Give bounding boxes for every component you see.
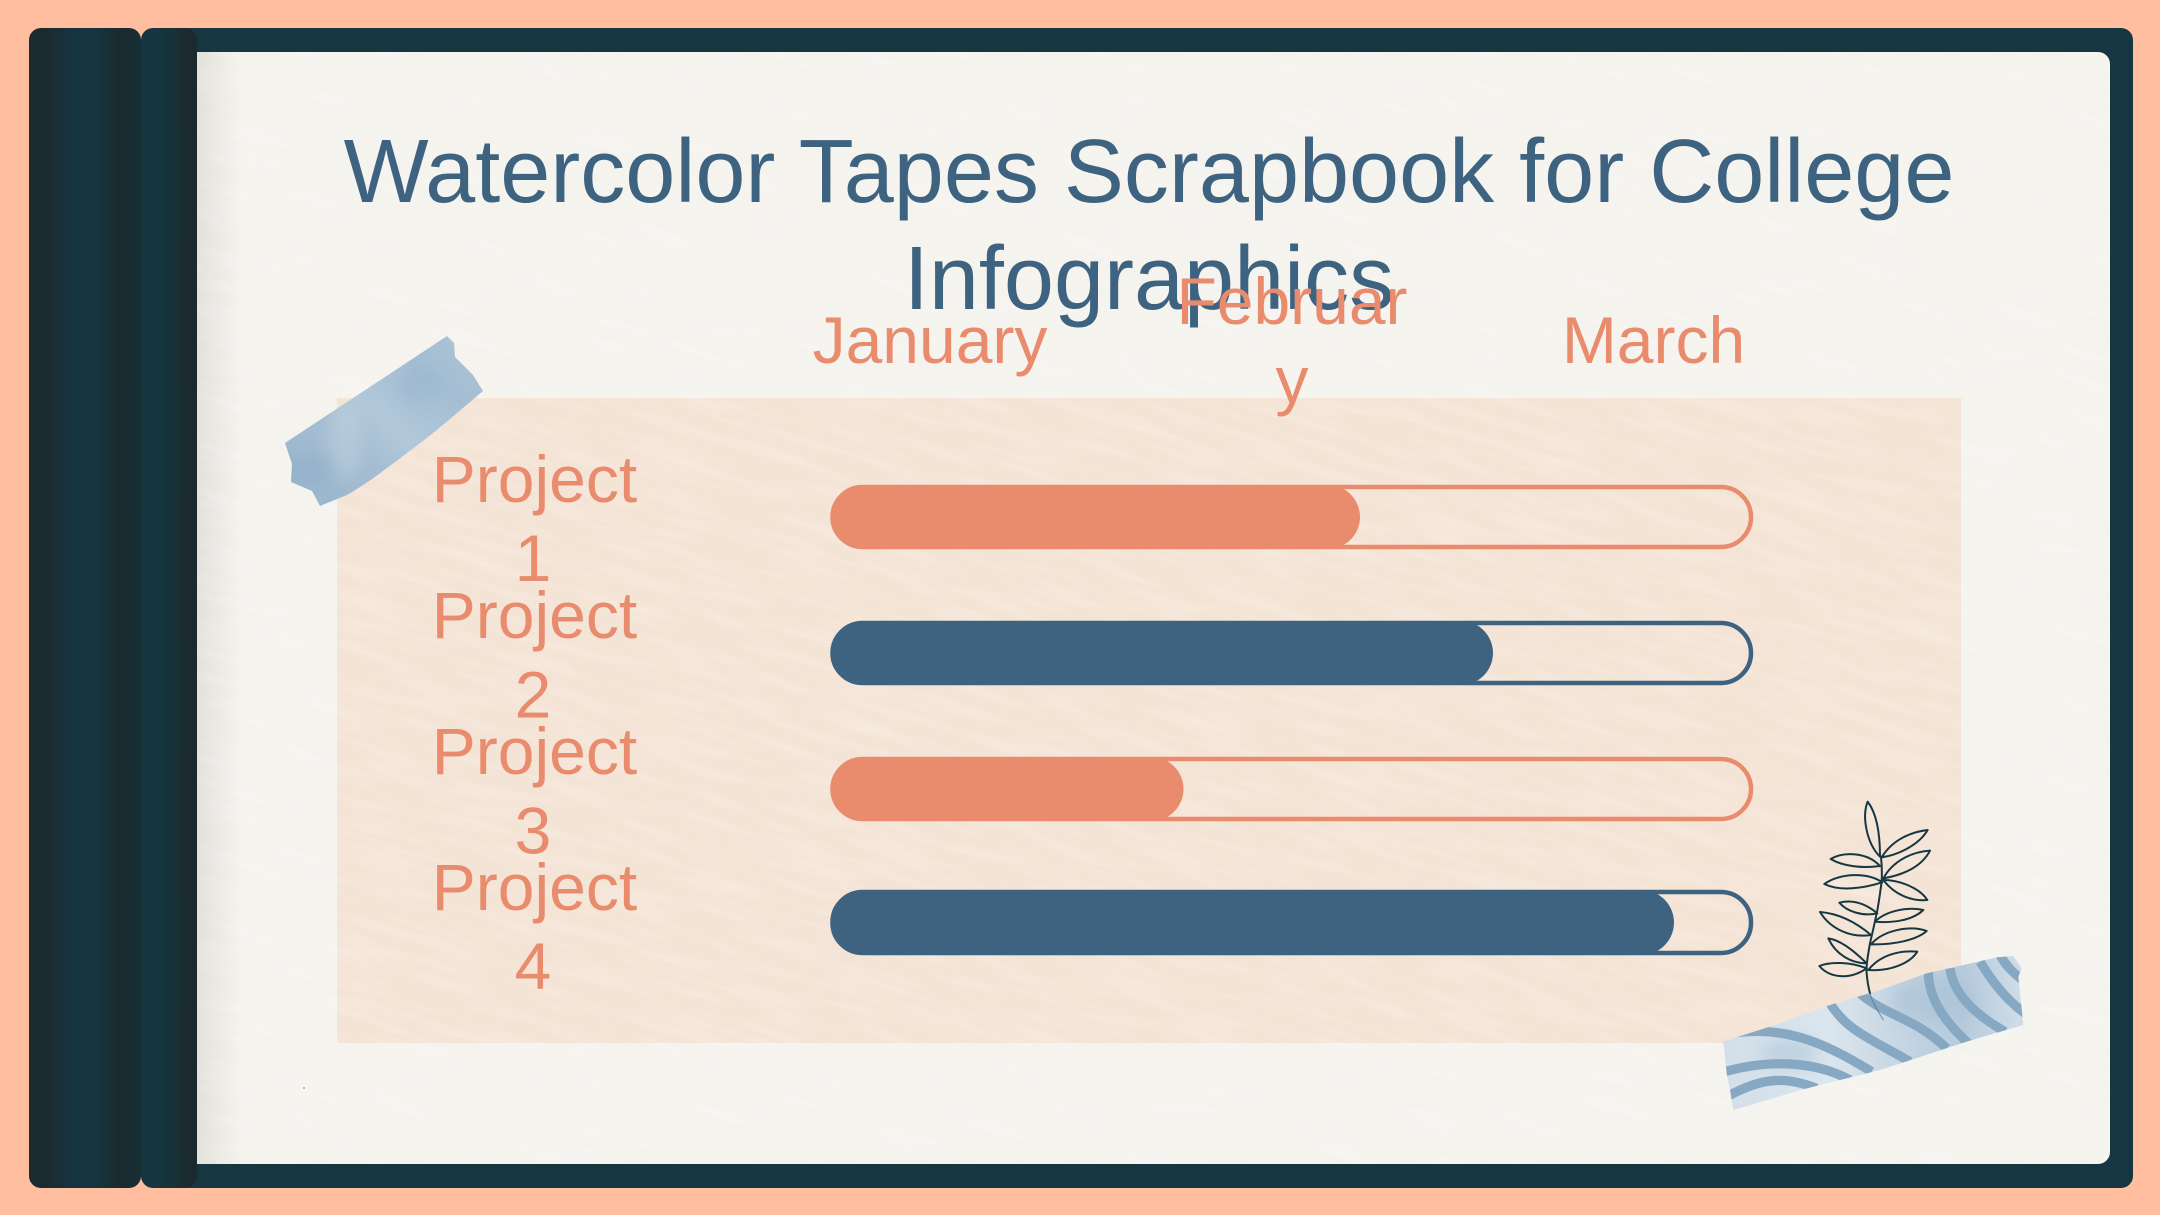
label: Project 3: Project bbox=[432, 714, 637, 788]
month: February: y bbox=[1276, 343, 1308, 417]
label: Project 4: 4 bbox=[515, 929, 551, 1003]
title: Watercolor Tapes Scrapbook for College bbox=[344, 122, 1954, 222]
bar: Project 1 bbox=[830, 485, 1751, 549]
label: Project 2: 2 bbox=[515, 658, 551, 732]
month: February: Februar bbox=[1176, 264, 1408, 338]
month: March: March bbox=[1562, 303, 1745, 377]
washi tape: striped blue, bottom right bbox=[1722, 955, 2025, 1110]
icon: botanical sprig bbox=[1819, 802, 1930, 1020]
bar: Project 4 bbox=[830, 890, 1751, 955]
project labels bbox=[432, 442, 637, 1003]
month: January: January bbox=[813, 303, 1047, 377]
gantt bars bbox=[830, 485, 1751, 955]
washi tape: plain blue, top left bbox=[285, 336, 483, 506]
label: Project 3: 3 bbox=[515, 794, 551, 868]
label: Project 4: Project bbox=[432, 850, 637, 924]
label: Project 1: 1 bbox=[515, 521, 551, 595]
title: Infographics bbox=[904, 229, 1394, 329]
beige content panel bbox=[337, 398, 1961, 1043]
label: Project 2: Project bbox=[432, 578, 637, 652]
book spines bbox=[29, 28, 197, 1188]
month headers bbox=[813, 264, 1745, 417]
label: Project 1: Project bbox=[432, 442, 637, 516]
bar: Project 2 bbox=[830, 621, 1751, 685]
bar: Project 3 bbox=[830, 757, 1751, 821]
